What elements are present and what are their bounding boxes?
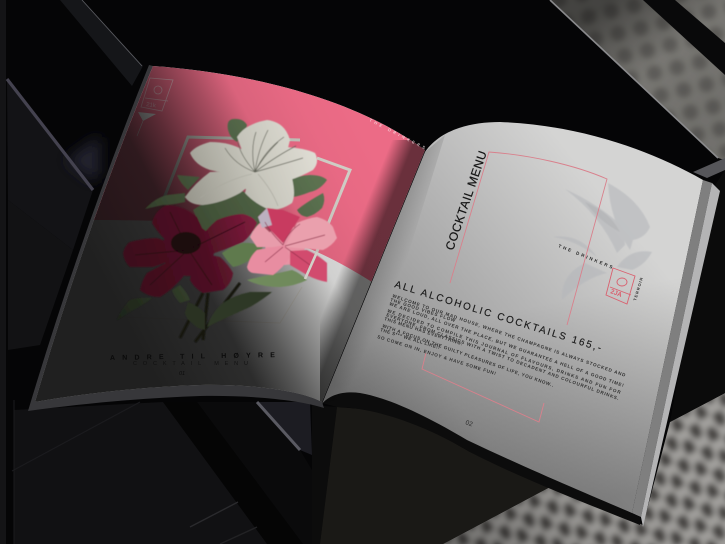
page background pink and white [35,66,425,402]
stamp: right page logo [606,268,635,304]
icon: cocktail glass [137,112,156,136]
text block: body copy: WITH A FOCUS ON THE GUILTY PLEASURES OF LIFE, YOU KNOW.. [382,323,554,388]
text: terroir vertical: TERROIR [632,277,644,301]
dark red flower [123,205,257,297]
stamp: left page logo [141,78,173,111]
text block: body copy: THIS MENU HAS EVERYTHING. [384,316,463,346]
background: top right foam panel [550,0,725,178]
red outline frame [422,152,607,422]
text: page number 02: 02 [464,419,474,428]
page edge grey strip [632,180,712,517]
text block: body copy: THE GOOD VIBES FLOW [390,297,457,323]
text block: body copy: WE ARE LOUD, ALL OVER THE PLACE, BUT WE GUARANTEE A HELL OF A GOOD TIME! [389,301,625,388]
white azalea [185,120,317,210]
background: pedestal under the book [320,407,550,544]
stamp: right page logo: 2JA [609,288,623,299]
illustration: flower bouquet [117,119,337,342]
illustration: faint leaves [553,183,652,300]
page background [322,122,703,513]
stems [180,283,240,342]
book: back cover band under right page [322,391,640,525]
text: andre til hoyre: ANDRE TIL HØYRE [110,352,275,362]
text: the drinkers on pink: THE DRINKERS [369,117,426,150]
pink area [80,66,425,282]
pink azalea [247,208,337,282]
text block: body copy: SO COME ON IN, ENJOY & HAVE SOME FUN! [377,334,497,376]
page stack white edge [641,183,720,527]
text: page number 01: 01 [179,371,185,377]
shadow cast across left page [35,66,425,402]
frame behind flowers [120,137,350,323]
heading: all alcoholic cocktails: ALL ALCOHOLIC COCKTAILS 165,- [393,279,603,354]
background: bottom right foam panel [430,170,725,544]
text: cocktail menu subtitle: COCKTAIL MENU [133,361,248,367]
left page [35,66,440,420]
frame front stroke across pink flower [305,252,317,279]
text block: body copy: EVERYONE, FROM CLASSICS WITH A TWIST TO DECADENT AND COLOURFUL DRINKS. [386,312,620,401]
stamp: left page logo: 21k [146,102,157,109]
text block: body copy: WE DECIDED TO COMPILE THIS JOURNAL OF FLAVOURS, DRINKS AND FUN FOR [387,308,622,395]
leaves [117,119,327,330]
heading: cocktail menu: COCKTAIL MENU [443,149,490,252]
book: page stack left [28,65,324,411]
text: the drinkers: THE DRINKERS [558,243,613,270]
text block: body copy: WELCOME TO OUR MAD HOUSE, WHERE THE CHAMPAGNE IS ALWAYS STOCKED AND [392,293,627,378]
right page [322,122,720,527]
text block: body copy: THE S*** WE ALL LIKE!! [380,327,441,350]
